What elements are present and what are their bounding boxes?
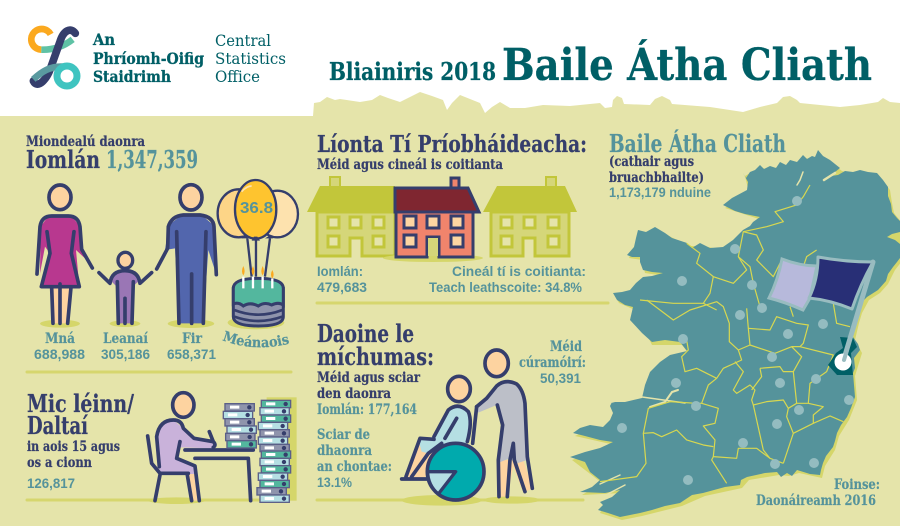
logo text: English (215, 31, 286, 86)
students text: os a cionn (27, 455, 92, 471)
households total: Iomlán: (317, 263, 363, 279)
logo text: Irish: Staidrimh (93, 67, 171, 86)
population heading: 1,347,359 (106, 145, 198, 174)
disability text (317, 319, 434, 490)
disability text: Daoine le (317, 319, 414, 348)
county town dots (617, 196, 854, 485)
most common house type: Cineál tí is coitianta: (452, 263, 586, 279)
flag on Dublin (769, 257, 873, 370)
most common house type (429, 263, 586, 295)
child (99, 252, 152, 323)
balloons and cake: median age (218, 180, 298, 329)
households heading (317, 130, 587, 173)
seated person (402, 376, 470, 479)
Dublin heading: (cathair agus (609, 154, 694, 170)
source (756, 477, 880, 509)
children label: Leanaí (103, 331, 149, 347)
students text: 126,817 (27, 475, 75, 491)
Dublin area highlight (828, 337, 857, 375)
population heading: Iomlán (26, 145, 100, 174)
students text: Mic léinn/ (27, 389, 134, 418)
logo text: English: Statistics (215, 49, 286, 68)
children label (101, 331, 150, 362)
source: Daonáireamh 2016 (756, 493, 876, 509)
men label: Fir (182, 331, 203, 347)
most common house type: Teach leathscoite: 34.8% (429, 279, 583, 295)
disability text: míchumas: (317, 342, 434, 371)
population heading (26, 134, 198, 174)
logo text: Irish: An (92, 30, 115, 49)
student at desk illustration (148, 393, 253, 504)
women label: Mná (45, 331, 75, 347)
women label: 688,988 (34, 346, 85, 362)
disability text: den daonra (317, 386, 391, 402)
map of Ireland coast shadow (572, 153, 900, 520)
logo text: English: Office (215, 67, 260, 86)
women label (34, 331, 85, 362)
source: Foinse: (834, 477, 880, 493)
disability text: Sciar de (317, 427, 370, 443)
population heading: Miondealú daonra (26, 134, 145, 150)
Dublin heading (609, 129, 786, 200)
disability text: an chontae: (317, 459, 392, 475)
logo text: Irish (92, 30, 204, 86)
median age value: 36.8 (240, 200, 273, 217)
disability text: 13.1% (317, 474, 352, 490)
map inlets (600, 172, 835, 498)
Dublin heading: bruachbhailte) (609, 170, 704, 186)
man (157, 185, 216, 323)
logo (31, 29, 77, 86)
Dublin heading: Baile Átha Cliath (609, 129, 786, 158)
family illustration (37, 185, 216, 328)
disability text: dhaonra (317, 443, 372, 459)
median age label, curved: Meánaois (222, 330, 289, 348)
house: right (483, 177, 577, 256)
house: left (307, 177, 395, 256)
men label (167, 331, 216, 362)
carers text: cúramóirí: (519, 355, 586, 371)
county borders north (640, 185, 817, 310)
title: Bliainiris 2018 (329, 57, 496, 86)
carers text: Méid (550, 339, 582, 355)
woman (37, 185, 92, 323)
carers text: 50,391 (540, 370, 581, 386)
disability text: Méid agus sciar (317, 370, 421, 386)
Dublin heading: 1,173,179 nduine (609, 184, 711, 200)
logo text: Irish: Phríomh-Oifig (93, 49, 204, 68)
carers text (519, 339, 586, 386)
households heading: Méid agus cineál is coitianta (317, 157, 503, 173)
disability text: Iomlán: 177,164 (317, 402, 417, 418)
house: centre, most common type (383, 178, 483, 262)
students text (27, 389, 134, 491)
households heading: Líonta Tí Príobháideacha: (317, 130, 587, 158)
map of Ireland (570, 150, 900, 517)
students text: in aois 15 agus (27, 439, 120, 455)
households total: 479,683 (317, 279, 367, 295)
county borders (600, 300, 850, 483)
binder stacks (223, 397, 297, 502)
wheel as pie chart: 13.1% (427, 443, 484, 500)
logo text: English: Central (215, 31, 271, 50)
students text: Daltaí (27, 411, 88, 440)
title (329, 38, 872, 91)
households total (317, 263, 367, 295)
carer and wheelchair illustration (402, 350, 540, 506)
men label: 658,371 (167, 346, 216, 362)
children label: 305,186 (101, 346, 150, 362)
carer (473, 350, 533, 497)
